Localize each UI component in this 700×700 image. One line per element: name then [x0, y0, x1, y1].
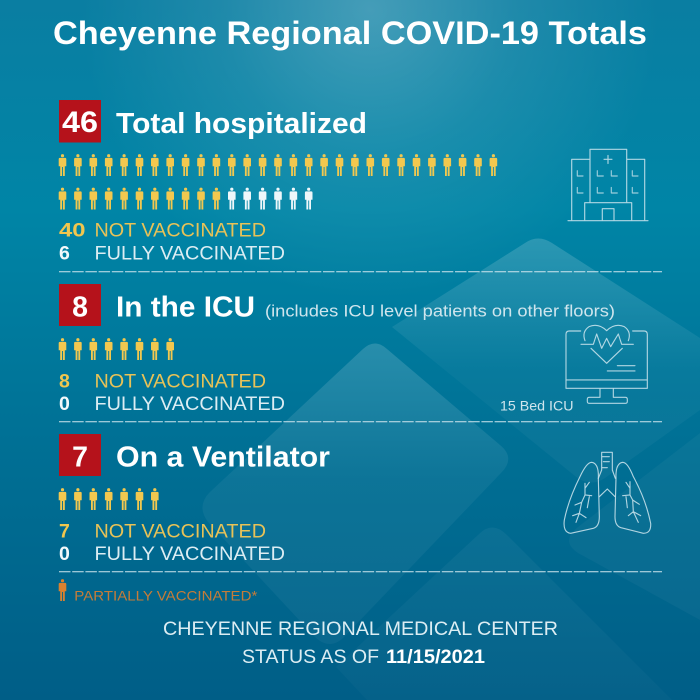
heading: in the ICU: In the ICU	[116, 292, 255, 324]
stat: not vaccinated: NOT VACCINATED	[94, 371, 266, 393]
stat: fully vaccinated: FULLY VACCINATED	[94, 543, 285, 565]
footer: 11/15/2021	[386, 646, 485, 668]
heading: on a ventilator: On a Ventilator	[116, 442, 330, 474]
stat: fully vaccinated: FULLY VACCINATED	[94, 242, 285, 264]
stat: fully vaccinated: 6	[59, 242, 70, 264]
stat: not vaccinated: 8	[59, 371, 70, 393]
panel: total hospitalized	[59, 100, 648, 264]
icon: heart monitor	[566, 325, 647, 403]
stat: fully vaccinated: 0	[59, 393, 70, 415]
pictogram: ICU patients	[59, 338, 174, 360]
panel: in the ICU	[59, 284, 647, 415]
footer: CHEYENNE REGIONAL MEDICAL CENTER	[163, 618, 558, 640]
title: Cheyenne Regional COVID-19 Totals	[53, 15, 647, 51]
count badge: 46	[59, 100, 101, 142]
icon: hospital	[568, 149, 648, 221]
panel: on a ventilator	[59, 434, 651, 565]
count badge: 8: 8	[72, 292, 88, 324]
count badge: 7	[59, 434, 101, 476]
icon: lungs	[564, 452, 651, 533]
stat: not vaccinated: 40	[59, 220, 86, 242]
note: ICU level patients: (includes ICU level patients on other floors)	[265, 303, 615, 321]
pictogram: hospitalized patients	[59, 154, 497, 210]
count badge: 46: 46	[62, 106, 98, 139]
stat: fully vaccinated: FULLY VACCINATED	[94, 393, 285, 415]
stat: fully vaccinated: 0	[59, 543, 70, 565]
stat: not vaccinated: NOT VACCINATED	[94, 220, 266, 242]
footer: STATUS AS OF	[242, 646, 379, 668]
stat: not vaccinated: NOT VACCINATED	[94, 521, 266, 543]
stat: not vaccinated: 7	[59, 521, 70, 543]
footer	[163, 618, 558, 668]
pictogram: ventilator patients	[59, 488, 159, 510]
count badge: 7: 7	[72, 442, 88, 474]
caption: 15 bed ICU: 15 Bed ICU	[500, 399, 574, 414]
legend: partially vaccinated: PARTIALLY VACCINATED*	[74, 588, 258, 604]
heading: total hospitalized: Total hospitalized	[116, 108, 367, 140]
count badge: 8	[59, 284, 101, 326]
legend: partially vaccinated	[59, 579, 258, 604]
